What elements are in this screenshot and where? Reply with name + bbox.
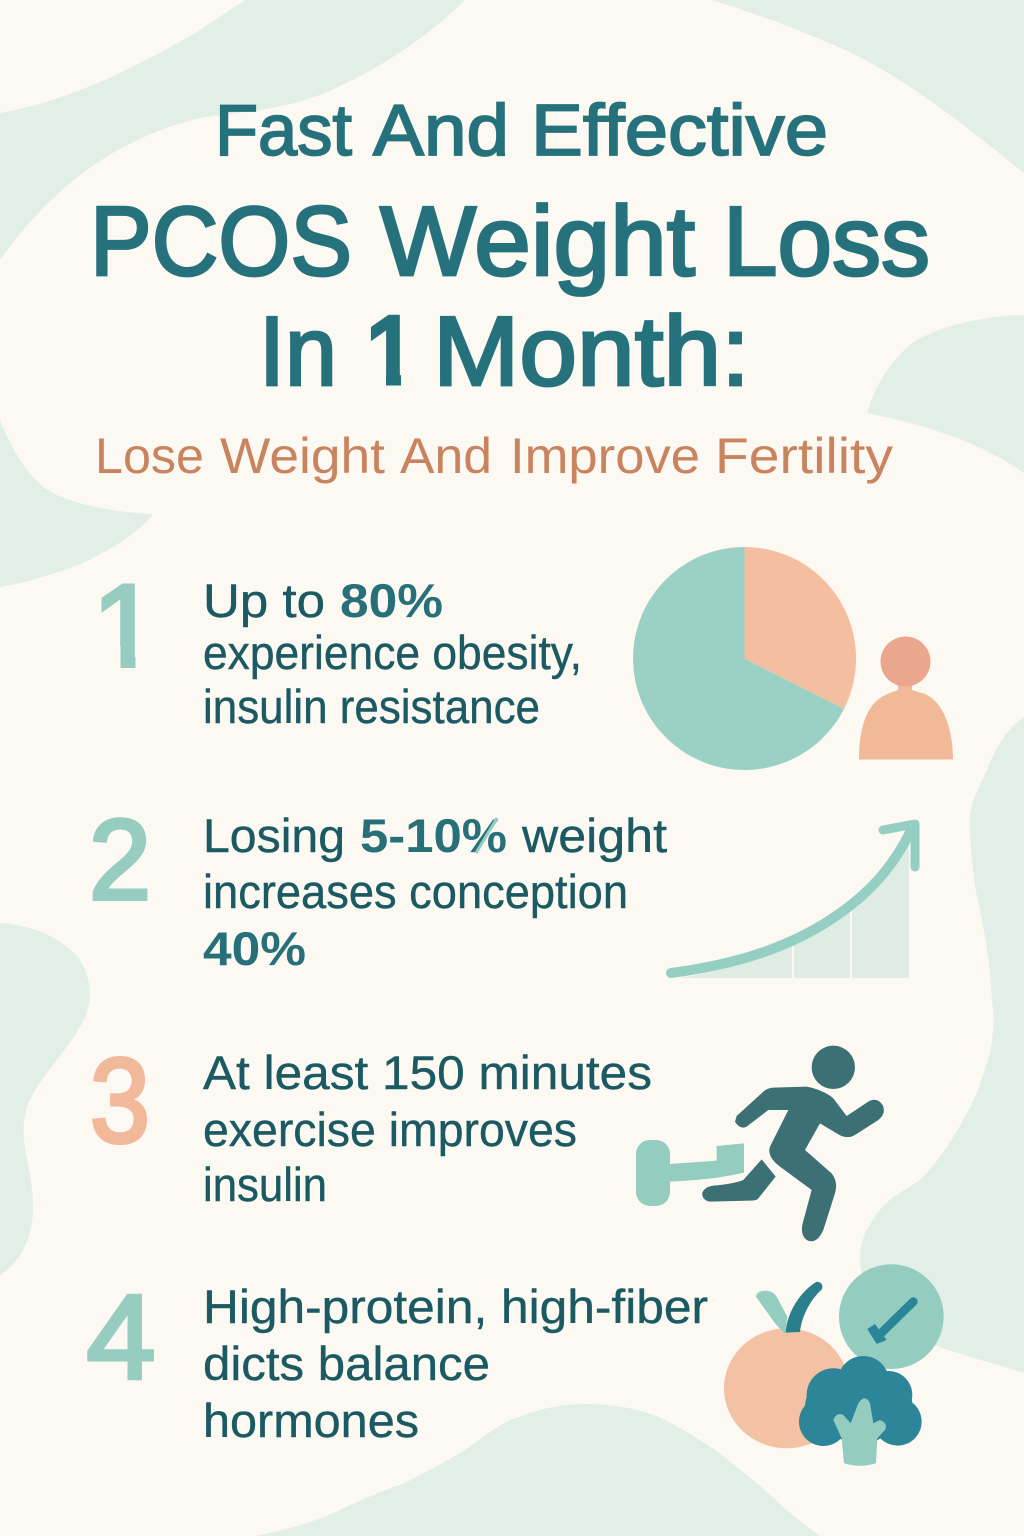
title line: Fast And Effective: Fast xyxy=(215,91,352,171)
item 3 text: insulin xyxy=(203,1158,327,1211)
item 4 text xyxy=(203,1280,708,1447)
item 1 text: 80% xyxy=(340,574,443,627)
subtitle: Improve xyxy=(510,428,700,484)
title line: In 1 Month: 1 xyxy=(364,296,419,406)
icon: person xyxy=(859,636,953,760)
item 1 text: experience obesity, xyxy=(203,626,582,679)
item 2 text xyxy=(203,809,667,975)
item 3 text: exercise improves xyxy=(203,1103,577,1156)
item 4 xyxy=(86,1264,944,1466)
title line: PCOS Weight Loss xyxy=(90,186,930,296)
icon: dumbbell xyxy=(636,1140,744,1206)
subtitle: Weight xyxy=(220,428,385,484)
item 3 text xyxy=(203,1046,652,1211)
icon: broccoli xyxy=(799,1356,922,1466)
item 3 text: At least 150 minutes xyxy=(203,1046,652,1099)
number 2: 2 xyxy=(89,797,151,924)
item 2 text: 40% xyxy=(203,922,306,975)
subtitle xyxy=(95,428,893,484)
number 3: 3 xyxy=(90,1034,150,1168)
subtitle: Fertility xyxy=(715,428,893,484)
title line: PCOS Weight Loss: Loss xyxy=(723,186,930,296)
subtitle: And xyxy=(400,428,492,484)
icon: food group xyxy=(724,1264,944,1466)
item 1 text xyxy=(203,574,582,733)
title line: In 1 Month: In xyxy=(259,296,337,406)
subtitle: Lose xyxy=(95,428,204,484)
pie chart xyxy=(633,547,856,770)
icon: check circle xyxy=(839,1264,944,1369)
item 1 text: insulin resistance xyxy=(203,680,540,733)
title line: PCOS Weight Loss: Weight xyxy=(380,186,695,296)
title line: Fast And Effective: Effective xyxy=(531,91,828,171)
title line: Fast And Effective: And xyxy=(373,91,509,171)
title xyxy=(96,102,928,388)
number 4: 4 xyxy=(86,1270,156,1404)
item 4 text: dicts balance xyxy=(203,1337,490,1390)
icon: runner xyxy=(702,1046,884,1241)
item 3 xyxy=(90,1034,884,1241)
title line: Fast And Effective xyxy=(215,91,828,171)
title line: In 1 Month: Month: xyxy=(433,296,750,406)
number 1: 1 xyxy=(92,560,159,694)
item 1 text: Up to xyxy=(203,574,325,627)
title line: PCOS Weight Loss: PCOS xyxy=(90,186,352,296)
item 2 text: Losing xyxy=(203,809,345,862)
title line: In 1 Month xyxy=(266,312,742,388)
item 2 text: weight xyxy=(521,809,667,862)
item 2 xyxy=(89,797,915,978)
item 4 text: High-protein, high-fiber xyxy=(203,1280,708,1333)
item 2 text: increases conception xyxy=(203,865,628,918)
icon: apple xyxy=(724,1282,849,1448)
item 4 text: hormones xyxy=(203,1394,419,1447)
icon: rising curve chart xyxy=(671,824,915,978)
item 2 text: 5-10% xyxy=(360,809,507,862)
item 1 xyxy=(92,547,953,770)
